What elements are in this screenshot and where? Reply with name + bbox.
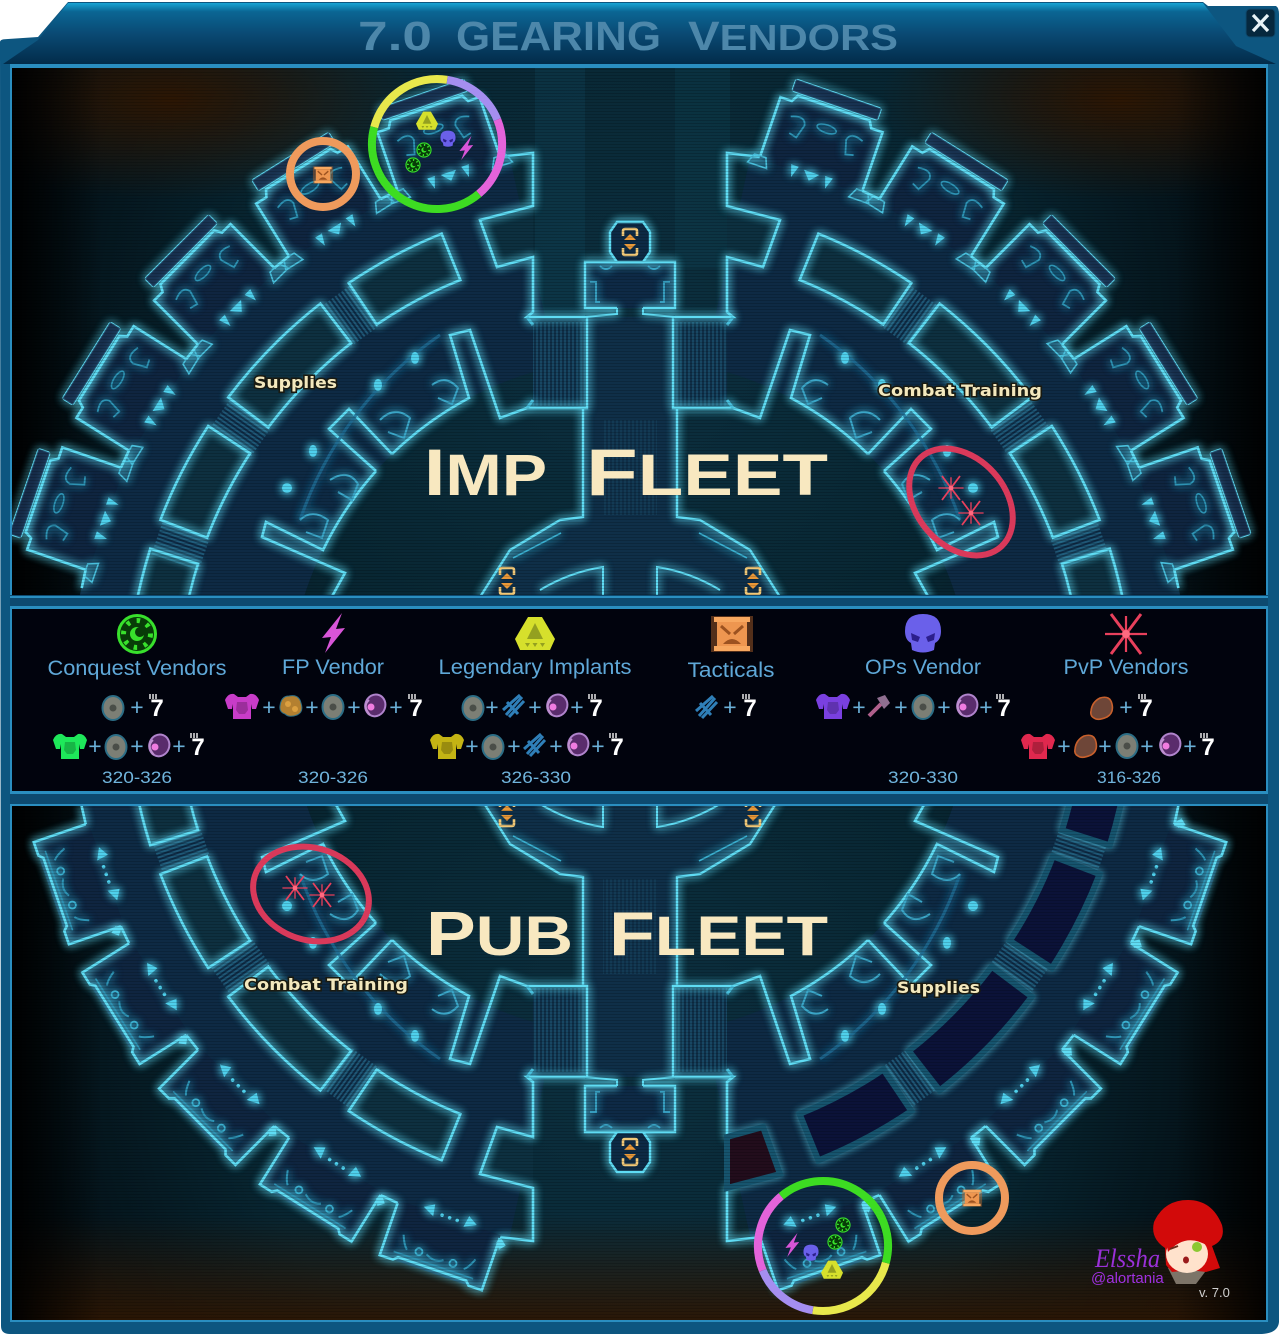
map label: supplies: Supplies [897,978,980,997]
title [358,13,898,59]
legend: pvp vendors: + [1057,733,1071,759]
legend: conquest vendors: 7 [191,734,205,761]
legend: ops vendor: + [979,694,993,720]
legend: legendary implants: + [591,733,605,759]
legend: fp vendor [225,613,423,787]
legend: legendary implants [430,617,632,787]
legend: pvp vendors: 7 [1201,734,1215,761]
legend: ops vendor: + [937,694,951,720]
legend: ops vendor: 320-330 [888,768,958,787]
legend: pvp vendors: + [1140,733,1154,759]
legend: conquest vendors: + [130,694,144,720]
legend: fp vendor: 7 [409,695,423,722]
legend: conquest vendors: + [88,733,102,759]
legend: ops vendor: 7 [997,695,1011,722]
legend: conquest vendors: 320-326 [102,768,172,787]
legend: legendary implants: + [465,733,479,759]
heading: pub fleet: PUB [426,900,573,969]
panel: legend [10,595,1268,807]
version note: v. 7.0 [1199,1285,1230,1300]
legend: pvp vendors: 316-326 [1097,768,1161,787]
pvp marker ring [888,428,1034,576]
panel: republic fleet map [10,806,1268,1322]
author credit: Elssha [1094,1244,1160,1273]
legend: legendary implants: + [485,694,499,720]
tacticals marker ring [290,141,356,207]
avatar: chibi portrait [1153,1200,1223,1284]
vendor cluster ring [758,1181,888,1311]
legend: tacticals: 7 [743,695,757,722]
legend: ops vendor: OPs Vendor [865,656,981,679]
legend: conquest vendors: Conquest Vendors [48,657,226,680]
legend: conquest vendors [48,616,226,787]
title: VENDORS [688,13,898,59]
legend: legendary implants: 7 [589,695,603,722]
legend: ops vendor [816,614,1011,787]
tacticals marker ring [939,1165,1005,1231]
panel: imperial fleet map: FLEET [586,435,828,509]
legend: fp vendor: + [347,694,361,720]
pvp marker ring [241,832,381,956]
header bar [3,3,1276,64]
legend: legendary implants: 326-330 [501,768,571,787]
title: 7.0 [358,13,432,59]
author credit [1091,1244,1164,1287]
legend: tacticals: + [723,694,737,720]
legend: legendary implants: 7 [610,734,624,761]
legend: legendary implants: + [549,733,563,759]
legend: pvp vendors [1021,614,1215,787]
legend: fp vendor: FP Vendor [282,656,384,679]
legend: fp vendor: + [262,694,276,720]
legend: ops vendor: + [852,694,866,720]
legend: fp vendor: 320-326 [298,768,368,787]
legend: fp vendor: + [305,694,319,720]
legend: legendary implants: + [507,733,521,759]
legend: tacticals [688,616,774,722]
legend: conquest vendors: + [172,733,186,759]
title: GEARING [456,13,661,59]
panel: imperial fleet map [0,0,1280,700]
panel: republic fleet map: FLEET [609,900,828,969]
author credit: @alortania [1091,1270,1164,1287]
map label: supplies: Supplies [254,373,337,392]
legend: conquest vendors: + [130,733,144,759]
legend: pvp vendors: 7 [1139,695,1153,722]
legend: ops vendor: + [894,694,908,720]
legend: fp vendor: + [389,694,403,720]
legend: tacticals: Tacticals [688,659,774,682]
legend: conquest vendors: 7 [150,695,164,722]
map label: combat training: Combat Training [244,975,408,994]
map label: combat training: Combat Training [878,381,1042,400]
legend: legendary implants: Legendary Implants [438,656,632,679]
heading: imp fleet: IMP [424,435,547,509]
legend: legendary implants: + [570,694,584,720]
close button [1246,9,1275,37]
legend: pvp vendors: PvP Vendors [1064,656,1188,679]
legend: pvp vendors: + [1098,733,1112,759]
legend: legendary implants: + [528,694,542,720]
legend: pvp vendors: + [1119,694,1133,720]
legend: pvp vendors: + [1183,733,1197,759]
vendor cluster ring [372,79,502,209]
